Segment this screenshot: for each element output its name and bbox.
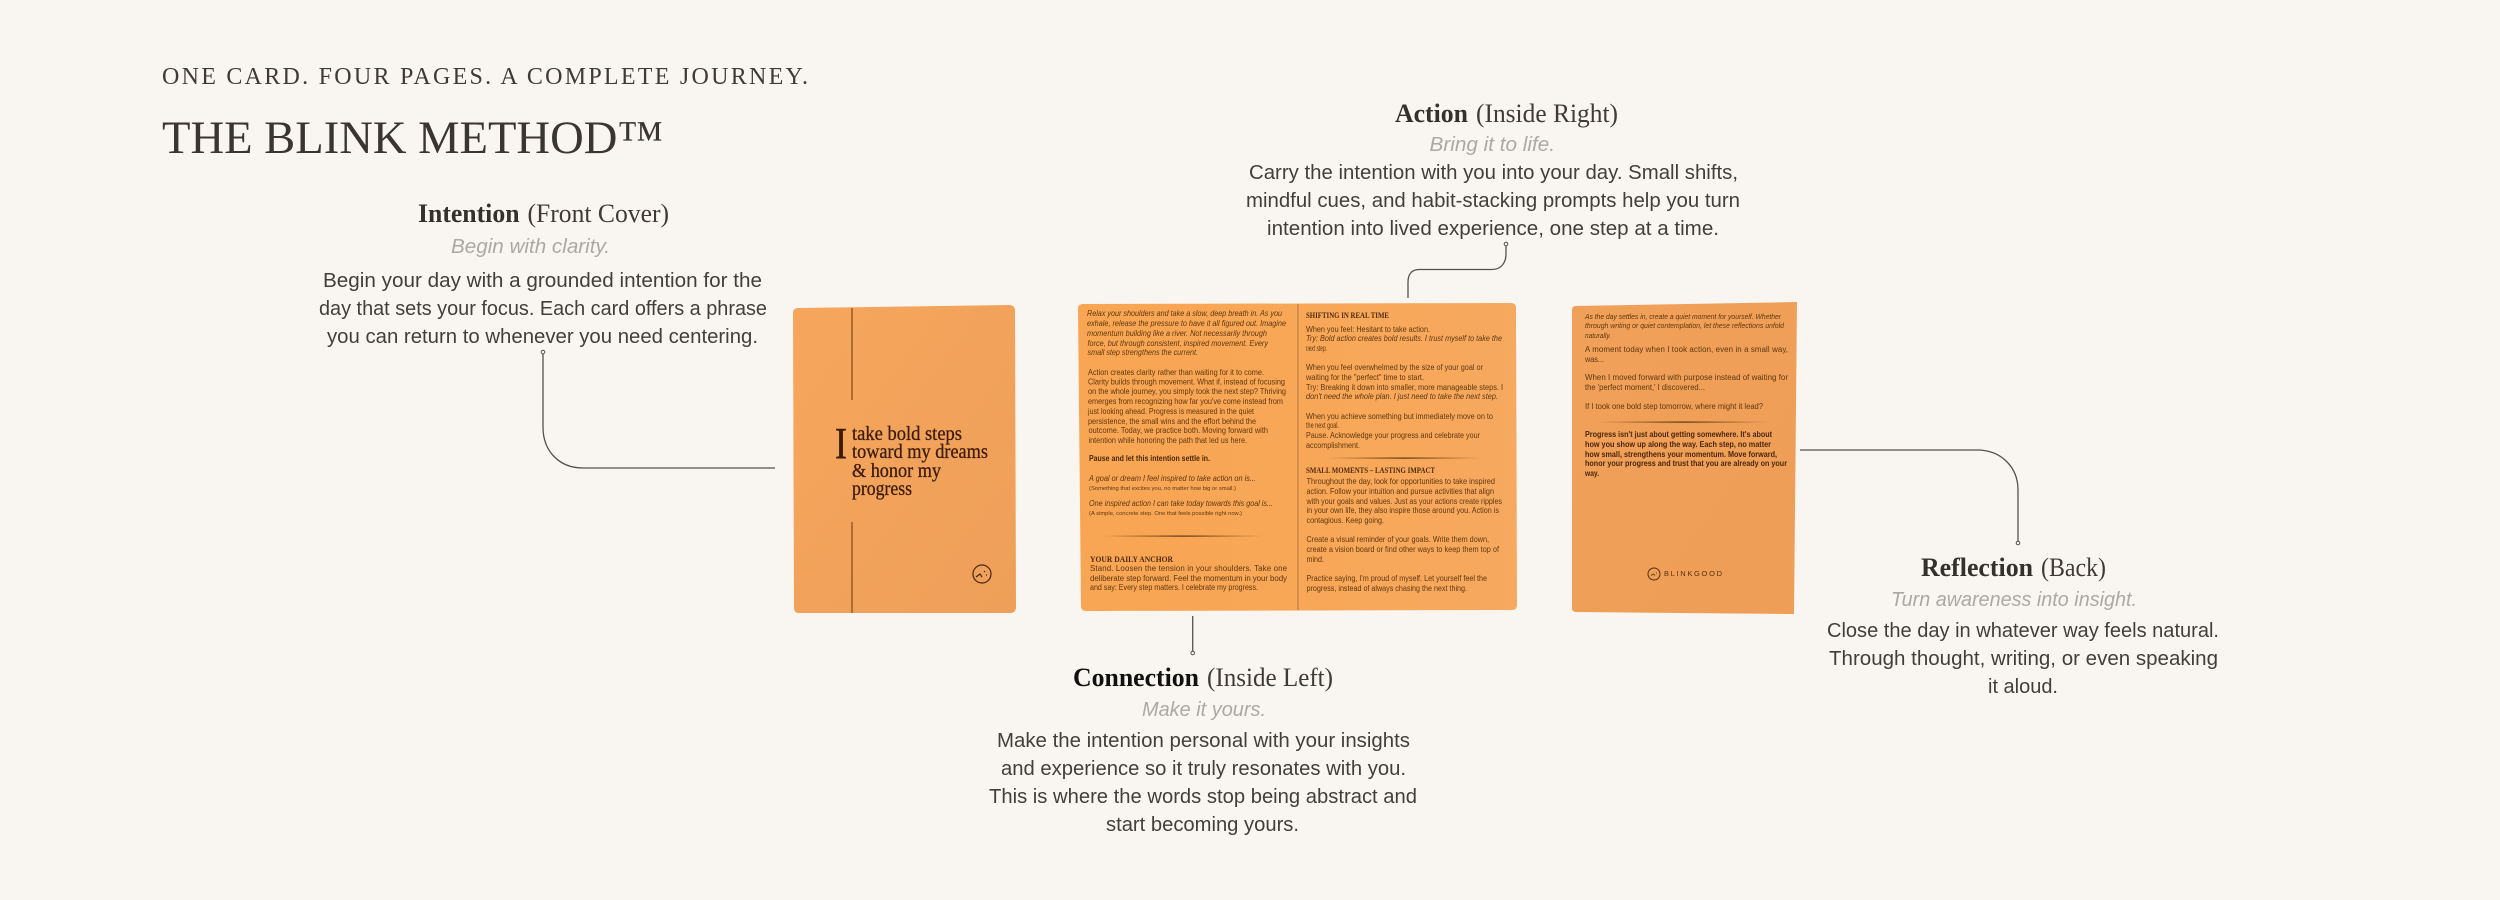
arrow: Connection connector [1191,616,1194,655]
inside right page text: create a vision board or find other ways to keep them top of [1306,545,1500,554]
inside left page text: YOUR DAILY ANCHOR [1090,554,1174,564]
text block: Reflection: (Back) [2041,553,2106,582]
inside left page text: on the whole journey, you simply took the next step? Thriving [1088,387,1286,396]
reflection prompts: through writing or quiet contemplation, let these reflections unfold [1585,321,1785,330]
reflection prompts: When I moved forward with purpose instead of waiting for [1585,373,1788,382]
text block: Connection: Make the intention personal with your insights [997,730,1410,752]
affirmation text: toward my dreams [852,442,988,463]
inside right page text: action. Follow your intuition and pursue activities that align [1306,487,1494,496]
text block: Reflection: Turn awareness into insight. [1891,589,2137,611]
panel: front cover card [793,305,1016,613]
inside left page text: intention while honoring the path that led us here. [1088,436,1247,445]
text block: Intention: you can return to whenever you need centering. [327,326,758,348]
affirmation text: progress [852,479,912,500]
text block: Reflection: Through thought, writing, or even speaking [1829,648,2218,670]
inside right page text: Pause. Acknowledge your progress and celebrate your [1306,431,1480,440]
inside right page text: contagious. Keep going. [1306,516,1384,525]
affirmation text [835,419,988,500]
spine fold [1297,304,1299,610]
reflection prompts [1584,312,1788,478]
inside left page text: Pause and let this intention settle in. [1089,454,1210,463]
text block: Action: (Inside Right) [1476,99,1618,128]
inside left page text: deliberate step forward. Feel the momentum in your body [1090,574,1287,583]
inside right page text: waiting for the "perfect" time to start. [1305,373,1424,382]
inside left page text: Stand. Loosen the tension in your shoulders. Take one [1090,564,1288,573]
arrow: Intention connector [541,350,775,468]
affirmation text: & honor my [852,461,941,482]
text block: Action: Carry the intention with you into your day. Small shifts, [1249,162,1738,184]
inside left page text: (A simple, concrete step. One that feels possible right now.) [1089,511,1242,517]
reflection prompts: A moment today when I took action, even in a small way, [1585,345,1788,354]
affirmation text: take bold steps [852,424,962,445]
inside right page text: with your goals and values. Just as your actions create ripples [1306,497,1502,506]
inside right page text: mind. [1306,555,1324,564]
arrow: Reflection connector [1800,450,2020,545]
text block: Connection [989,663,1417,836]
text block: Reflection [1827,553,2219,698]
inside left page text: persistence, the small wins and the effort behind the [1088,417,1257,426]
inside right page text: Throughout the day, look for opportunities to take inspired [1306,477,1495,486]
reflection prompts: If I took one bold step tomorrow, where might it lead? [1585,402,1764,411]
text block: Reflection: Reflection [1921,553,2034,582]
inside left page text: exhale, release the pressure to have it all figured out. Imagine [1087,319,1287,328]
inside right page text: Try: Breaking it down into smaller, more manageable steps. I [1306,383,1503,392]
text block: Action: Action [1395,99,1469,128]
icon: Blinkgood logo: BLINKGOOD [1664,569,1723,578]
inside left page text [1087,309,1288,592]
text block: Intention: Intention [418,199,520,228]
text block: Connection: and experience so it truly resonates with you. [1001,758,1406,780]
inside right page text: in your own life, they also inspire those around you. Action is [1306,506,1499,515]
icon: logo [973,565,991,583]
inside left page text: Relax your shoulders and take a slow, deep breath in. As you [1087,309,1283,318]
inside right page text: Create a visual reminder of your goals. Write them down, [1306,535,1489,544]
text block: Action: intention into lived experience, one step at a time. [1267,218,1719,240]
arrow: Action connector [1408,242,1508,298]
text block: Intention [319,199,767,348]
panel: inside spread card [1078,303,1517,611]
reflection prompts: way. [1584,469,1599,478]
text block: Connection: Make it yours. [1142,699,1266,721]
inside right page text: When you feel overwhelmed by the size of your goal or [1306,363,1483,372]
inside right page text: When you achieve something but immediately move on to [1306,412,1494,421]
text block: Connection: Connection [1073,663,1200,692]
reflection prompts: Progress isn't just about getting somewhere. It's about [1585,430,1772,439]
text block: Action [1246,99,1740,240]
text block: Reflection: Close the day in whatever way feels natural. [1827,620,2219,642]
text block: Intention: Begin your day with a grounded intention for the [323,270,762,292]
inside left page text: One inspired action I can take today towards this goal is... [1089,499,1273,508]
text block: Connection: (Inside Left) [1207,663,1333,692]
text block: Action: Bring it to life. [1430,134,1555,156]
text block: Action: mindful cues, and habit-stacking prompts help you turn [1246,190,1740,212]
inside left page text: A goal or dream I feel inspired to take action on is... [1088,474,1256,483]
eyebrow heading: ONE CARD. FOUR PAGES. A COMPLETE JOURNEY. [162,64,808,90]
text block: Reflection: it aloud. [1988,676,2058,698]
inside right page text: next step. [1306,344,1327,353]
text block: Intention: (Front Cover) [528,199,669,228]
inside left page text: (Something that excites you, no matter how big or small.) [1089,486,1236,492]
text block: Intention: day that sets your focus. Each card offers a phrase [319,298,767,320]
inside right page text [1305,310,1503,593]
panel: back card [1572,302,1797,614]
inside left page text: just looking ahead. Progress is measured in the quiet [1087,407,1255,416]
inside right page text: progress, instead of always chasing the next thing. [1306,584,1467,593]
inside left page text: small step strengthens the current. [1088,348,1198,357]
inside left page text: emerges from recognizing how far you've come instead from [1088,397,1283,406]
inside right page text: SMALL MOMENTS – LASTING IMPACT [1306,465,1435,475]
icon: Blinkgood logo [1648,568,1723,580]
inside left page text: force, but through consistent, inspired movement. Every [1088,339,1269,348]
inside left page text: and say: Every step matters. I celebrate my progress. [1090,583,1258,592]
inside right page text: Try: Bold action creates bold results. I trust myself to take the [1306,334,1503,343]
inside left page text: outcome. Today, we practice both. Moving forward with [1088,426,1268,435]
reflection prompts: how small, strengthens your momentum. Move forward, [1585,450,1777,459]
title: THE BLINK METHOD™ [162,112,663,164]
inside left page text: momentum building like a river. Not necessarily through [1087,329,1268,338]
reflection prompts: As the day settles in, create a quiet moment for yourself. Whether [1584,312,1781,321]
spine rule [851,308,853,613]
reflection prompts: the 'perfect moment,' I discovered... [1585,383,1705,392]
inside right page text: When you feel: Hesitant to take action. [1306,325,1430,334]
text block: Connection: start becoming yours. [1106,814,1299,836]
reflection prompts: honor your progress and trust that you are already on your [1585,459,1787,468]
reflection prompts: naturally. [1585,331,1611,340]
inside left page text: Clarity builds through movement. What if, instead of focusing [1088,378,1285,386]
text block: Intention: Begin with clarity. [451,236,610,258]
inside left page text: Action creates clarity rather than waiting for it to come. [1088,368,1264,377]
inside right page text: SHIFTING IN REAL TIME [1306,310,1389,320]
text block: Connection: This is where the words stop being abstract and [989,786,1417,808]
inside right page text: the next goal. [1306,421,1339,430]
reflection prompts: was... [1584,355,1604,364]
reflection prompts: how you show up along the way. Each step, no matter [1585,440,1771,449]
affirmation text: I [835,419,847,468]
inside right page text: don't need the whole plan. I just need to take the next step. [1306,392,1498,401]
inside right page text: accomplishment. [1306,441,1360,450]
inside right page text: Practice saying, I'm proud of myself. Let yourself feel the [1306,574,1488,583]
